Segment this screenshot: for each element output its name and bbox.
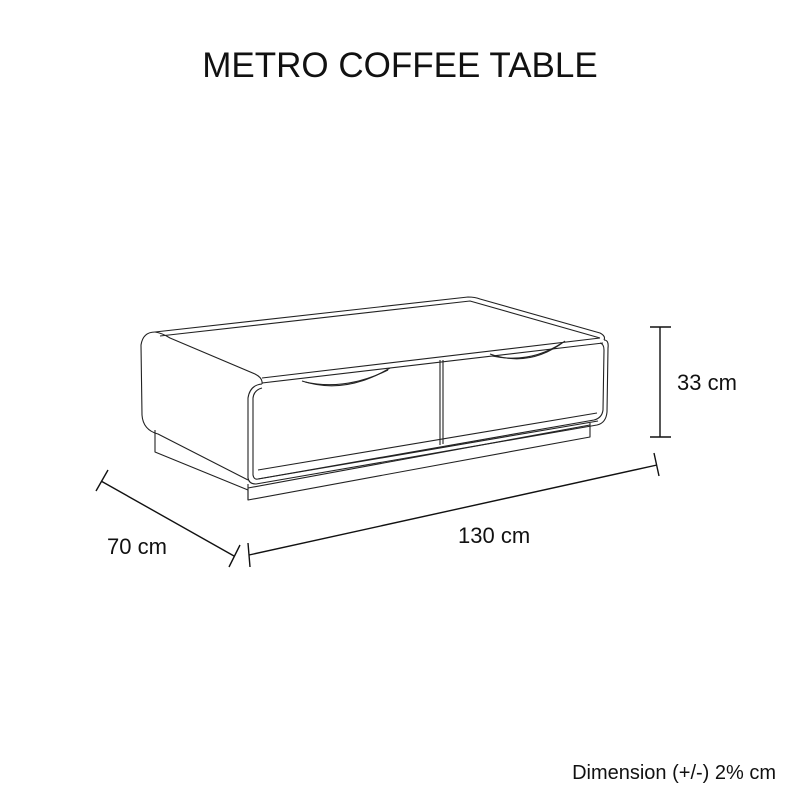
footnote: Dimension (+/-) 2% cm (572, 762, 776, 784)
front face frame (248, 340, 608, 484)
handles (302, 368, 390, 386)
label: height: 33 cm (677, 370, 737, 395)
plinth (155, 423, 590, 500)
left side panel (141, 332, 248, 480)
depth dim (96, 470, 240, 567)
dimension lines (96, 327, 671, 567)
title: METRO COFFEE TABLE (202, 46, 598, 85)
label: depth: 70 cm (107, 534, 167, 559)
height dim (650, 327, 671, 437)
table outline (141, 297, 608, 500)
length dim (248, 453, 659, 567)
label: length: 130 cm (458, 523, 530, 548)
drawer divider (440, 360, 443, 445)
top surface (155, 297, 604, 340)
